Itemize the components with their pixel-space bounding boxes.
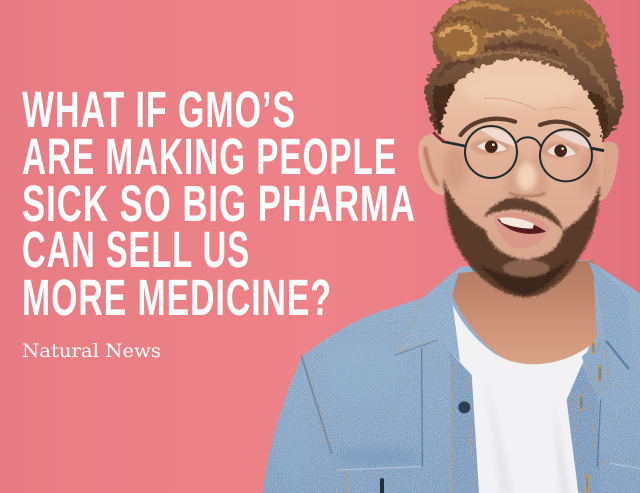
headline line 4: CAN SELL US — [22, 221, 250, 278]
eye sockets — [471, 139, 580, 158]
ear inner shading — [425, 147, 438, 185]
eyebrows — [461, 119, 588, 135]
nostrils shadow — [509, 193, 545, 197]
left ear — [418, 134, 450, 195]
right collar — [582, 260, 632, 396]
forehead highlight — [460, 70, 580, 107]
hair — [425, 0, 623, 142]
nose sides shadow — [505, 147, 548, 197]
forehead wrinkles — [483, 98, 577, 110]
nose — [505, 147, 548, 197]
head — [418, 0, 623, 297]
pocket flaps — [337, 467, 422, 470]
eye white — [477, 141, 507, 152]
dark side hair — [433, 83, 457, 135]
white t-shirt — [447, 293, 589, 493]
source: Natural News: Natural News — [22, 341, 161, 362]
left lens — [465, 126, 517, 178]
eye white — [547, 144, 576, 157]
neck — [450, 260, 597, 366]
orange stitching — [307, 302, 610, 493]
headline line 3: SICK SO BIG PHARMA — [22, 175, 416, 232]
mouth cavity — [497, 219, 546, 234]
teeth — [499, 217, 534, 229]
left temple — [433, 133, 465, 146]
photo: man with glasses — [263, 0, 640, 493]
cheek shadows — [443, 143, 600, 193]
jacket shadows — [302, 340, 628, 467]
headline — [22, 81, 416, 326]
right temple — [592, 148, 604, 151]
pupil light — [561, 147, 564, 150]
shirt folds — [487, 380, 570, 493]
moustache — [483, 197, 563, 230]
pocket pen — [380, 478, 384, 493]
denim light patches — [277, 340, 417, 480]
left eye — [477, 140, 507, 153]
right eye — [547, 144, 576, 157]
right ear — [593, 141, 619, 202]
curls — [435, 5, 613, 107]
denim jacket body — [263, 260, 640, 493]
headline line 1: WHAT IF GMO’S — [22, 81, 296, 138]
lips — [494, 212, 549, 248]
nose highlight — [517, 163, 537, 191]
pupil light — [492, 143, 495, 146]
lens reflections — [480, 128, 590, 148]
hair mass — [425, 0, 623, 142]
golden curl mass — [432, 15, 488, 62]
denim shirt and white tee — [263, 260, 640, 493]
glasses — [433, 126, 604, 181]
headline line 5: MORE MEDICINE? — [22, 269, 332, 326]
headline line 2: ARE MAKING PEOPLE — [22, 128, 397, 185]
right lens — [540, 129, 592, 181]
chin stubble — [503, 260, 549, 277]
temple red accent — [434, 133, 445, 142]
iris — [485, 140, 498, 153]
lower beard dark band — [478, 258, 570, 295]
iris — [554, 144, 567, 157]
shirt button — [458, 401, 470, 413]
bridge — [517, 137, 541, 147]
left placket — [448, 350, 479, 493]
collar buttonholes — [579, 342, 602, 492]
beard — [443, 178, 600, 297]
left collar — [394, 267, 460, 362]
face — [438, 57, 604, 288]
beard left side and jaw — [443, 178, 600, 297]
right placket — [567, 365, 601, 493]
mouth — [494, 212, 549, 248]
